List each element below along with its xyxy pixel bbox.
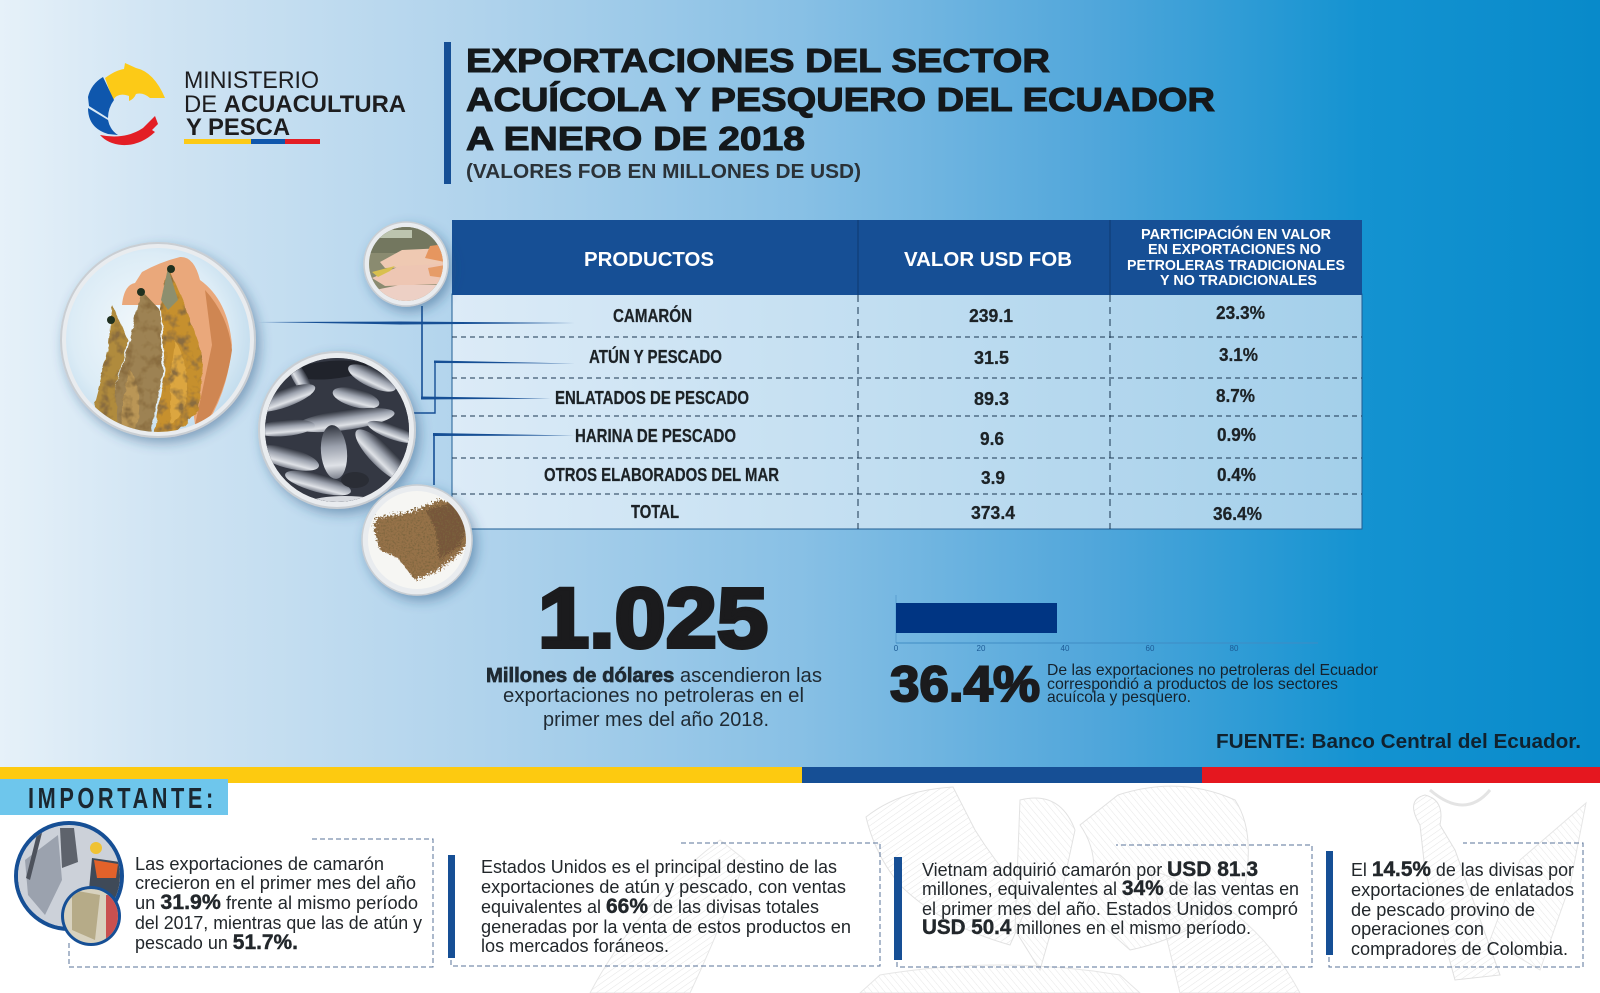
- logo: Ministerio de Acuacultura y Pesca: [88, 63, 406, 145]
- text: vietnam: USD 50.4 millones en el mismo período.: [922, 916, 1251, 939]
- text: vietnam: [922, 858, 1299, 939]
- stat description: [486, 665, 822, 731]
- column: valor: [969, 306, 1015, 523]
- data table: [452, 220, 1362, 529]
- column: valor: 3.9: [981, 468, 1005, 488]
- column: valor: 9.6: [980, 429, 1004, 449]
- icon: logo fish mark: [88, 63, 165, 145]
- subtitle: (VALORES FOB EN MILLONES DE USD): [466, 161, 861, 183]
- column: participacion: 0.9%: [1217, 425, 1256, 445]
- photo: fishing workers: [14, 821, 124, 946]
- column: participacion: 0.4%: [1217, 465, 1256, 485]
- table header: EN EXPORTACIONES NO: [1148, 242, 1321, 258]
- column: productos: ATÚN Y PESCADO: [589, 346, 722, 367]
- logo wordmark: MINISTERIO: [184, 67, 319, 94]
- text: atun: equivalentes al 66% de las divisas totales: [481, 895, 819, 918]
- text: atun: generadas por la venta de estos productos en: [481, 917, 851, 937]
- table header: VALOR USD FOB: [904, 249, 1072, 271]
- column: productos: TOTAL: [631, 502, 679, 522]
- stat: 36.4%: [890, 656, 1379, 712]
- column: participacion: 3.1%: [1219, 345, 1258, 365]
- big number: 1.025: [538, 571, 768, 665]
- photo: fish meal powder: [362, 485, 472, 595]
- percentage description: [1047, 662, 1379, 706]
- logo wordmark: DE ACUACULTURA: [184, 91, 406, 118]
- axis labels: 20: [977, 644, 986, 653]
- column: participacion: 23.3%: [1216, 303, 1265, 323]
- title: ACUÍCOLA Y PESQUERO DEL ECUADOR: [466, 81, 1215, 118]
- percentage description: correspondió a productos de los sectores: [1047, 676, 1338, 693]
- stat description: Millones de dólares ascendieron las: [486, 665, 822, 687]
- panel: atun: [448, 843, 880, 966]
- axis labels: 40: [1061, 644, 1070, 653]
- text: camaron: Las exportaciones de camarón: [135, 854, 384, 874]
- column: productos: OTROS ELABORADOS DEL MAR: [544, 465, 779, 485]
- connector lines: [258, 306, 575, 485]
- text: colombia: operaciones con: [1351, 919, 1484, 939]
- percentage description: acuícola y pesquero.: [1047, 689, 1191, 706]
- logo wordmark: [184, 67, 406, 141]
- column: productos: CAMARÓN: [613, 305, 692, 326]
- text: atun: [481, 857, 851, 956]
- text: camaron: un 31.9% frente al mismo período: [135, 891, 418, 914]
- panel: camaron: [69, 839, 433, 967]
- column: valor: 239.1: [969, 306, 1013, 326]
- title: [466, 42, 1215, 157]
- panel: vietnam: [894, 845, 1312, 967]
- text: camaron: del 2017, mientras que las de atún y: [135, 913, 422, 933]
- axis labels: 80: [1230, 644, 1239, 653]
- background gradient panel: [0, 0, 1600, 770]
- connector: enlatados: [421, 306, 551, 400]
- bar: 36.4%: [896, 603, 1057, 633]
- axis labels: 60: [1146, 644, 1155, 653]
- text: colombia: [1351, 858, 1574, 959]
- column: participacion: 36.4%: [1213, 504, 1262, 524]
- column: participacion: 8.7%: [1216, 386, 1255, 406]
- title block: [444, 42, 1215, 184]
- panel: colombia: [1326, 843, 1583, 967]
- accent bar: [448, 855, 455, 958]
- white lower panel: [0, 783, 1600, 993]
- axis labels: [894, 644, 1239, 653]
- accent bar: [894, 857, 902, 960]
- text: camaron: crecieron en el primer mes del año: [135, 873, 416, 893]
- table header: [452, 220, 1362, 295]
- bar chart: [894, 595, 1318, 653]
- axis labels: 0: [894, 644, 899, 653]
- text: colombia: de pescado provino de: [1351, 900, 1535, 920]
- text: camaron: pescado un 51.7%.: [135, 931, 298, 954]
- stat description: exportaciones no petroleras en el: [503, 685, 804, 707]
- text: vietnam: millones, equivalentes al 34% de las ventas en: [922, 877, 1299, 900]
- table body: [452, 294, 1362, 529]
- column: participacion: [1213, 303, 1265, 524]
- text: atun: los mercados foráneos.: [481, 936, 669, 956]
- table header: PARTICIPACIÓN EN VALOR: [1141, 225, 1332, 243]
- column: productos: HARINA DE PESCADO: [575, 426, 736, 446]
- column: valor: 373.4: [971, 503, 1015, 523]
- connector: camaron: [258, 322, 575, 324]
- title: A ENERO DE 2018: [466, 120, 805, 157]
- column: productos: [544, 305, 779, 522]
- stat description: primer mes del año 2018.: [543, 709, 769, 731]
- table header: Y NO TRADICIONALES: [1160, 273, 1317, 289]
- text: vietnam: el primer mes del año. Estados Unidos compró: [922, 899, 1298, 919]
- text: atun: exportaciones de atún y pescado, con ventas: [481, 877, 846, 897]
- source: FUENTE: Banco Central del Ecuador.: [1216, 731, 1581, 753]
- table header: PRODUCTOS: [584, 249, 714, 271]
- text: colombia: El 14.5% de las divisas por: [1351, 858, 1574, 881]
- photo: shrimp in hand: [61, 243, 255, 440]
- importante heading: IMPORTANTE:: [28, 783, 213, 815]
- photo: fish fillets: [364, 222, 448, 306]
- column: valor: 31.5: [974, 348, 1009, 368]
- text: camaron: [135, 854, 422, 954]
- text: colombia: compradores de Colombia.: [1351, 939, 1568, 959]
- text: atun: Estados Unidos es el principal destino de las: [481, 857, 837, 877]
- stat: 1.025 millones: [486, 571, 822, 731]
- text: vietnam: Vietnam adquirió camarón por USD 81.3: [922, 858, 1258, 881]
- accent bar: [1326, 851, 1333, 955]
- connector: atun: [414, 360, 575, 413]
- percentage: 36.4%: [890, 656, 1040, 712]
- column: valor: 89.3: [974, 389, 1009, 409]
- title: EXPORTACIONES DEL SECTOR: [466, 42, 1050, 79]
- title accent bar: [444, 42, 451, 184]
- logo tricolor rule: [184, 139, 320, 144]
- text: colombia: exportaciones de enlatados: [1351, 880, 1574, 900]
- logo wordmark: Y PESCA: [186, 114, 290, 141]
- photo: pile of tuna: [252, 352, 420, 508]
- watermark: coat of arms line art: [590, 786, 1586, 993]
- table header: PETROLERAS TRADICIONALES: [1127, 258, 1345, 274]
- column: productos: ENLATADOS DE PESCADO: [555, 388, 749, 408]
- connector: harina: [433, 433, 575, 485]
- tricolor band: [0, 767, 1600, 783]
- percentage description: De las exportaciones no petroleras del Ecuador: [1047, 662, 1379, 679]
